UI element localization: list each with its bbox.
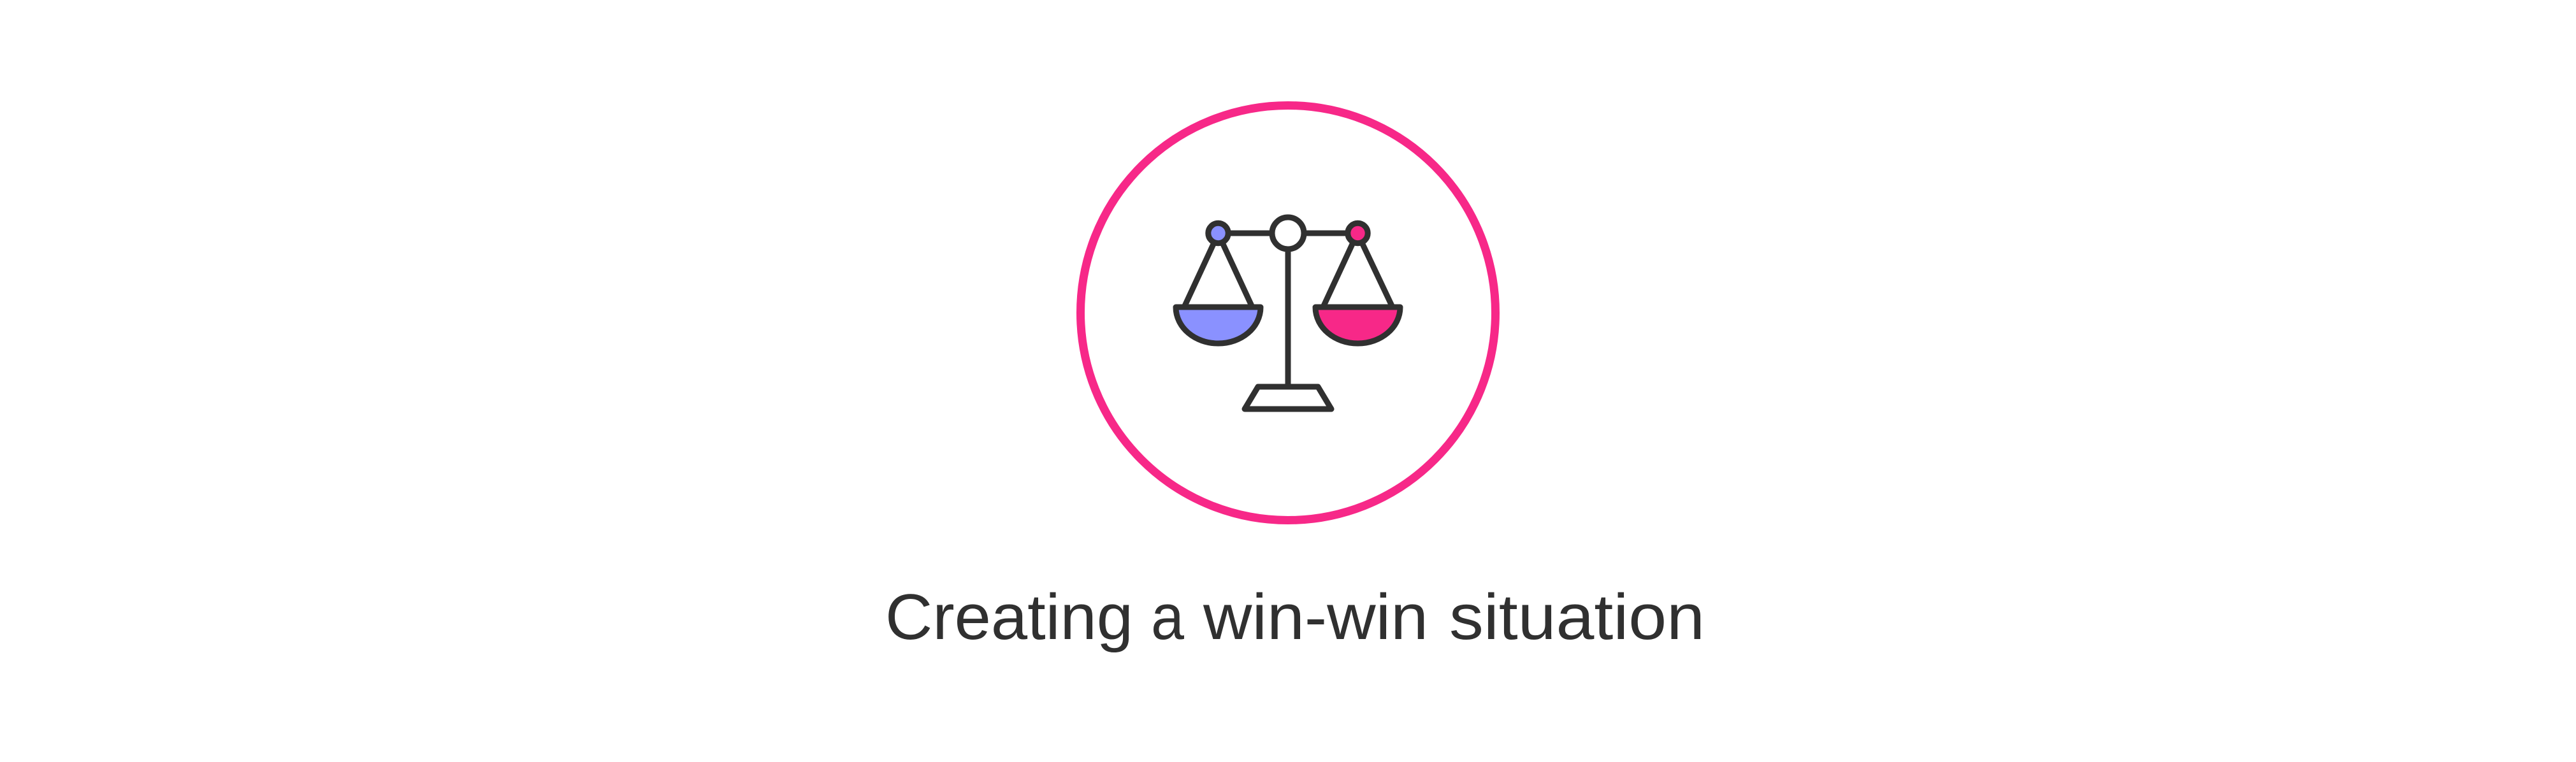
left blue pivot (1208, 223, 1228, 243)
caption: situation (1449, 582, 1705, 653)
right pan strings (1324, 244, 1392, 306)
caption: a (1151, 582, 1185, 653)
right pink pivot (1348, 223, 1368, 243)
icon: balance scale (1176, 217, 1400, 409)
left blue pan (1176, 307, 1261, 343)
pink circle outline (1081, 106, 1495, 520)
caption: win-win (1203, 582, 1428, 653)
center pivot (1272, 217, 1304, 249)
caption: Creating (885, 582, 1133, 653)
scale beam (1230, 231, 1346, 236)
right pink pan (1315, 307, 1400, 343)
left pan strings (1185, 244, 1252, 306)
scale base (1245, 387, 1331, 409)
caption (885, 582, 1705, 653)
scale post (1285, 252, 1291, 387)
